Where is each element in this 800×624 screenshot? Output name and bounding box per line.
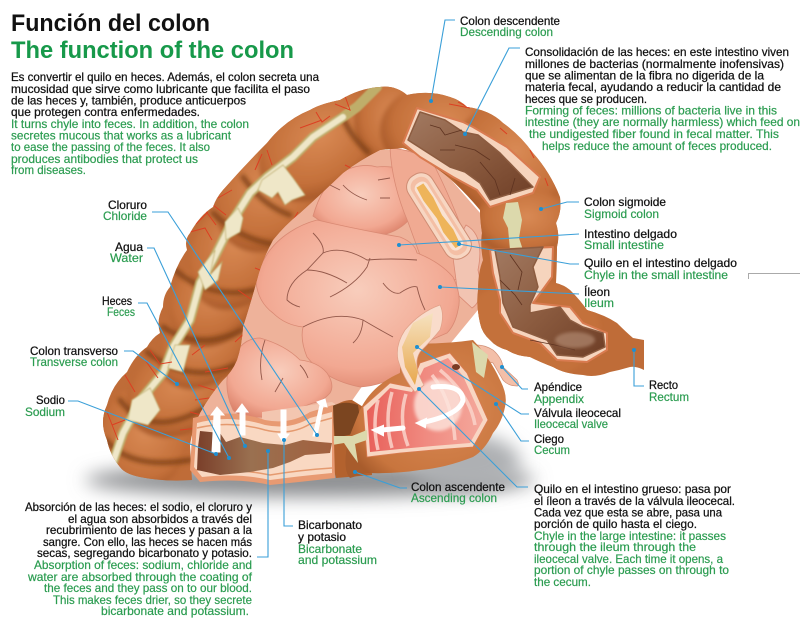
leader: bicarbonate (282, 438, 293, 526)
intro text: que protegen contra enfermedades. (11, 105, 200, 119)
leader: chloride (152, 212, 319, 437)
illustration: colon and small intestine (94, 65, 655, 492)
intro text: Es convertir el quilo en heces. Además, el colon secreta una (11, 70, 319, 84)
intro text: from diseases. (11, 163, 86, 177)
label: ascending colon: Ascending colon (411, 491, 497, 505)
label: chloride: Cloruro (108, 198, 147, 212)
folds (375, 370, 475, 450)
ascending colon (330, 400, 372, 478)
intro text: mucosidad que sirve como lubricante que facilita el paso (11, 82, 310, 96)
label: cecum (534, 432, 570, 457)
label: small intestine: Intestino delgado (584, 227, 677, 241)
sigmoid and rectum cut-away with feces (490, 247, 607, 362)
appendix (474, 345, 518, 386)
cut section of small intestine with chyle (402, 168, 476, 264)
label: ileocecal valve (534, 406, 621, 431)
grey bracket (748, 274, 800, 279)
leader: consolidation (463, 48, 520, 136)
cecum (345, 340, 506, 478)
leader: rectum (632, 348, 644, 386)
label: ileum (584, 284, 614, 310)
ileum with chyle (397, 305, 442, 392)
text: chyle in the large intestine: Quilo en el intestino grueso: pasa por (534, 482, 731, 496)
floor shadow (85, 434, 535, 497)
text: absorption of feces: Absorption of feces: sodium, chloride and (34, 558, 252, 572)
sigmoid strip (503, 202, 523, 250)
intestine folds (261, 178, 425, 392)
label: feces (102, 294, 135, 319)
label: sigmoid colon: Colon sigmoide (584, 195, 666, 209)
text: chyle in the large intestine: portion of chyle passes on through to (534, 563, 729, 577)
opened colon section with feces (190, 405, 335, 485)
label: ascending colon: Colon ascendente (411, 480, 505, 494)
white arrows: absorption (211, 399, 327, 452)
leader: descending colon (429, 20, 455, 103)
intro text: secretes mucous that works as a lubricant (11, 128, 232, 142)
text: absorption of feces: the feces and they pass on to our blood. (44, 581, 252, 595)
label: cecum: Ciego (534, 432, 564, 446)
leader: chyle in large intestine (417, 387, 528, 487)
intro text: to ease the passing of the feces. It also (11, 140, 210, 154)
text: chyle in the large intestine: Chyle in the large intestine: it passes (534, 529, 726, 543)
label: sigmoid colon: Sigmoid colon (584, 207, 659, 221)
label: rectum: Recto (649, 378, 678, 392)
text: chyle in the large intestine: the cecum. (534, 575, 591, 589)
label: water: Agua (115, 240, 143, 254)
intro text: produces antibodies that protect us (11, 152, 198, 166)
leader: cecum (494, 402, 529, 441)
label: ileocecal valve: Ileocecal valve (534, 417, 608, 431)
leader: ascending colon (353, 470, 407, 488)
text: absorption of feces: recubrimiento de las heces y pasan a la (46, 523, 252, 537)
text: chyle in the large intestine: through the ileum through the (534, 540, 696, 554)
label: sigmoid colon (584, 195, 666, 221)
label: cecum: Cecum (534, 443, 570, 457)
text: absorption of feces: secas, segregando bicarbonato y potasio. (37, 546, 252, 560)
text: absorption of feces: sangre. Con ello, las heces se hacen más (43, 535, 252, 549)
inner abdominal background (195, 150, 495, 430)
label: ileum: Ileum (584, 296, 614, 310)
label: descending colon: Colon descendente (460, 14, 560, 28)
leader: small intestine (397, 234, 579, 247)
text: consolidation of feces: the undigested fiber found in fecal matter. This (529, 127, 779, 141)
leader: water (147, 248, 247, 448)
label: chyle in small intestine (584, 256, 737, 282)
intro text (11, 70, 319, 177)
text: chyle in the large intestine: ileocecal valve. Each time it opens, a (534, 552, 723, 566)
label: descending colon: Descending colon (460, 25, 553, 39)
text: consolidation of feces: Consolidación de las heces: en este intestino viven (525, 45, 789, 59)
label: ileum: Íleon (584, 284, 610, 299)
label: chloride: Chloride (103, 209, 147, 223)
leader: transverse colon (124, 351, 179, 386)
text: consolidation of feces: heces que se producen. (525, 92, 647, 106)
label: descending colon (460, 14, 560, 39)
feces mass (197, 431, 332, 475)
label: ileocecal valve: Válvula ileocecal (534, 406, 621, 420)
intro text: It turns chyle into feces. In addition, the colon (11, 117, 249, 131)
label: transverse colon: Transverse colon (30, 355, 118, 369)
text: absorption of feces: bicarbonate and potassium. (101, 604, 249, 618)
text: consolidation of feces: materia fecal, ayudando a reducir la cantidad de (525, 80, 781, 94)
descending colon cut-away with feces (403, 108, 540, 207)
text: absorption of feces: This makes feces drier, so they secrete (53, 593, 252, 607)
label: bicarbonate and potassium: y potasio (298, 530, 346, 544)
label: bicarbonate and potassium: Bicarbonato (298, 518, 362, 532)
ascending colon strip (332, 430, 367, 463)
white arrow: chyle path in cecum (373, 387, 463, 435)
label: small intestine: Small intestine (584, 238, 664, 252)
label: sodium (25, 393, 65, 419)
label: sodium: Sodium (25, 405, 65, 419)
text: consolidation of feces: Forming of feces: millions of bacteria live in this (525, 104, 777, 118)
text: chyle in the large intestine: porción de quilo hasta el ciego. (534, 517, 697, 531)
leader: absorption (257, 449, 270, 557)
text: absorption of feces: Absorción de las heces: el sodio, el cloruro y (25, 500, 252, 514)
label: water: Water (110, 251, 143, 265)
label: rectum (649, 378, 689, 404)
label: ascending colon (411, 480, 505, 505)
label: appendix (534, 380, 584, 406)
text: chyle in the large intestine (534, 482, 735, 589)
leader lines (68, 20, 644, 557)
title: English: The function of the colon (11, 37, 294, 64)
label: bicarbonate and potassium: Bicarbonate (298, 542, 362, 556)
title: Spanish: Función del colon (11, 10, 210, 37)
leader: chyle in small intestine (457, 242, 579, 264)
small intestine loops (227, 148, 480, 425)
label: transverse colon: Colon transverso (30, 344, 118, 358)
label: bicarbonate and potassium (298, 518, 377, 567)
text: chyle in the large intestine: Cada vez que esta se abre, pasa una (534, 506, 722, 520)
leader: sigmoid colon (539, 202, 579, 211)
label: appendix: Appendix (534, 392, 584, 406)
text: absorption of feces: water are absorbed through the coating of (27, 570, 253, 584)
label: water (110, 240, 143, 265)
text: consolidation of feces: intestine (they are normally harmless) which feed on (525, 115, 800, 129)
leader: ileocecal valve (415, 345, 529, 414)
text: consolidation of feces (525, 45, 800, 153)
label: bicarbonate and potassium: and potassium (298, 553, 377, 567)
leader: appendix (500, 365, 528, 389)
label: feces: Heces (102, 294, 132, 308)
leader: ileum (438, 285, 579, 294)
label: appendix: Apéndice (534, 380, 582, 394)
label: chyle in small intestine: Chyle in the small intestine (584, 268, 728, 282)
intro text: de las heces y, también, produce anticuerpos (11, 94, 246, 108)
text: consolidation of feces: que se alimentan de la fibra no digerida de la (525, 68, 764, 82)
colon band: transverse, descending, sigmoid, rectum (103, 86, 644, 481)
text: chyle in the large intestine: el íleon a través de la válvula ileocecal. (534, 494, 735, 508)
leader: sodium (68, 401, 218, 456)
red veins (107, 96, 548, 440)
label: transverse colon (30, 344, 118, 369)
text: consolidation of feces: helps reduce the amount of feces produced. (542, 139, 772, 153)
text: absorption of feces: el agua son absorbidos a través del (68, 512, 252, 526)
label: chloride (103, 198, 147, 223)
haustra lobes (94, 65, 600, 492)
label: small intestine (584, 227, 677, 252)
cecum cut-away (363, 353, 488, 457)
text: consolidation of feces: millones de bacterias (normalmente inofensivas) (525, 57, 784, 71)
label: sodium: Sodio (36, 393, 65, 407)
leader: feces (138, 303, 231, 460)
label: feces: Feces (107, 305, 135, 319)
seams between haustra (106, 118, 368, 462)
taenia strip (113, 87, 377, 462)
label: rectum: Rectum (649, 390, 689, 404)
label: chyle in small intestine: Quilo en el intestino delgado (584, 256, 737, 270)
text: absorption of feces (25, 500, 253, 618)
